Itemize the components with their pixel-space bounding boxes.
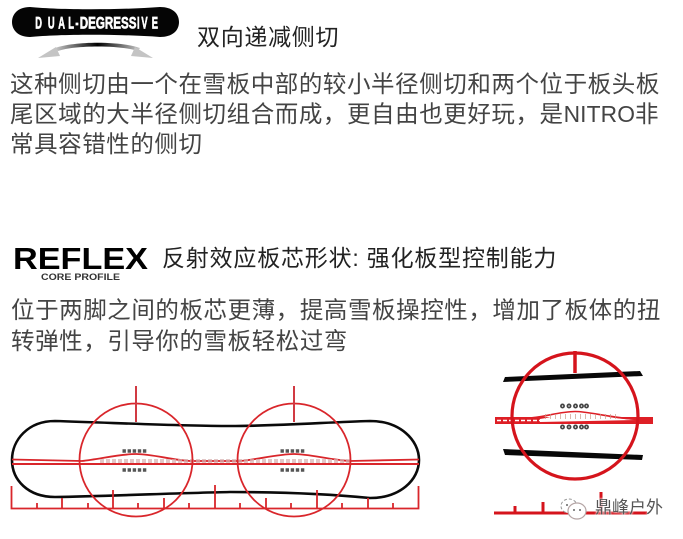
text block: core profile description <box>11 297 661 354</box>
dots <box>122 451 306 470</box>
icon: dual-degressive board badge with arrow: DEGRESS <box>80 13 137 32</box>
icon: watermark bubbles <box>560 498 587 520</box>
dots <box>561 404 588 429</box>
text block: sidecut description: 常具容错性的侧切 <box>10 131 203 157</box>
core bar <box>495 417 653 424</box>
text block: sidecut description: 尾区域的大半径侧切组合而成，更自由也更好玩，是NITRO非 <box>10 101 659 127</box>
board outline <box>12 421 419 498</box>
watermark <box>560 497 663 520</box>
circles <box>80 404 192 516</box>
ruler <box>494 492 647 513</box>
icon: dual-degressive board badge with arrow: DUAL- <box>35 14 79 32</box>
text block: core profile description: 位于两脚之间的板芯更薄，提高雪板操控性，增加了板体的扭 <box>11 297 661 323</box>
watermark text: 鼎峰户外 <box>595 498 663 517</box>
heading: dual degressive: 双向递减侧切 <box>197 24 339 50</box>
icon: dual-degressive board badge with arrow <box>12 7 179 58</box>
centre profile line <box>12 454 419 461</box>
icon: dual-degressive board badge with arrow: IVE <box>137 14 158 32</box>
heading: reflex core profile: 反射效应板芯形状: 强化板型控制能力 <box>162 245 557 271</box>
ruler <box>12 485 418 508</box>
text block: sidecut description <box>10 71 660 157</box>
text block: sidecut description: 这种侧切由一个在雪板中部的较小半径侧切和两个位于板头板 <box>10 71 660 97</box>
text block: core profile description: 转弹性，引导你的雪板轻松过弯 <box>11 328 348 354</box>
circle <box>512 353 638 479</box>
edge bars <box>503 371 643 382</box>
icon: reflex core profile logo: CORE PROFILE <box>41 272 120 282</box>
